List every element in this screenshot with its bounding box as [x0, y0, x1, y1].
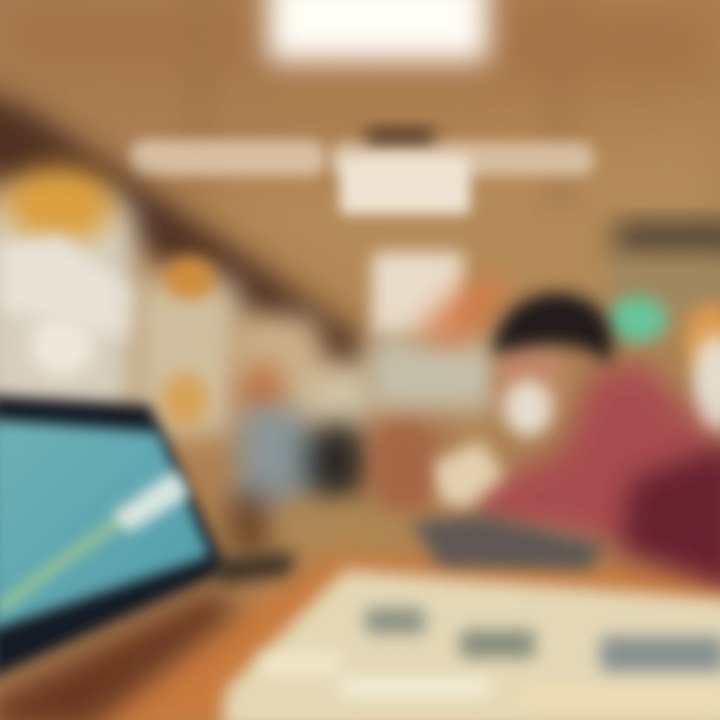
sweater [478, 360, 720, 590]
screen [0, 420, 210, 630]
wooden desk [0, 555, 720, 720]
left row of white and orange objects [0, 167, 375, 435]
chart line [0, 515, 130, 608]
blurred title [130, 126, 594, 214]
monitor with line chart [0, 395, 295, 680]
right background: dark shelf and green accent [608, 222, 720, 435]
chart highlight [112, 470, 190, 532]
arm [380, 425, 428, 505]
face [494, 336, 566, 420]
central white panel and orange accents [368, 252, 512, 411]
skylight [268, 0, 488, 61]
document table marks [260, 608, 720, 706]
background figure in grey [228, 405, 368, 555]
laptop on desk [412, 515, 605, 570]
lower middle warm haze [270, 410, 442, 565]
diagonal dark roof beam [0, 85, 365, 380]
papers held [504, 380, 552, 436]
documents in foreground [222, 570, 720, 720]
monitor stand shadow [215, 552, 295, 585]
person working at laptop [380, 292, 720, 590]
hair [492, 292, 613, 365]
monitor frame [0, 395, 228, 680]
